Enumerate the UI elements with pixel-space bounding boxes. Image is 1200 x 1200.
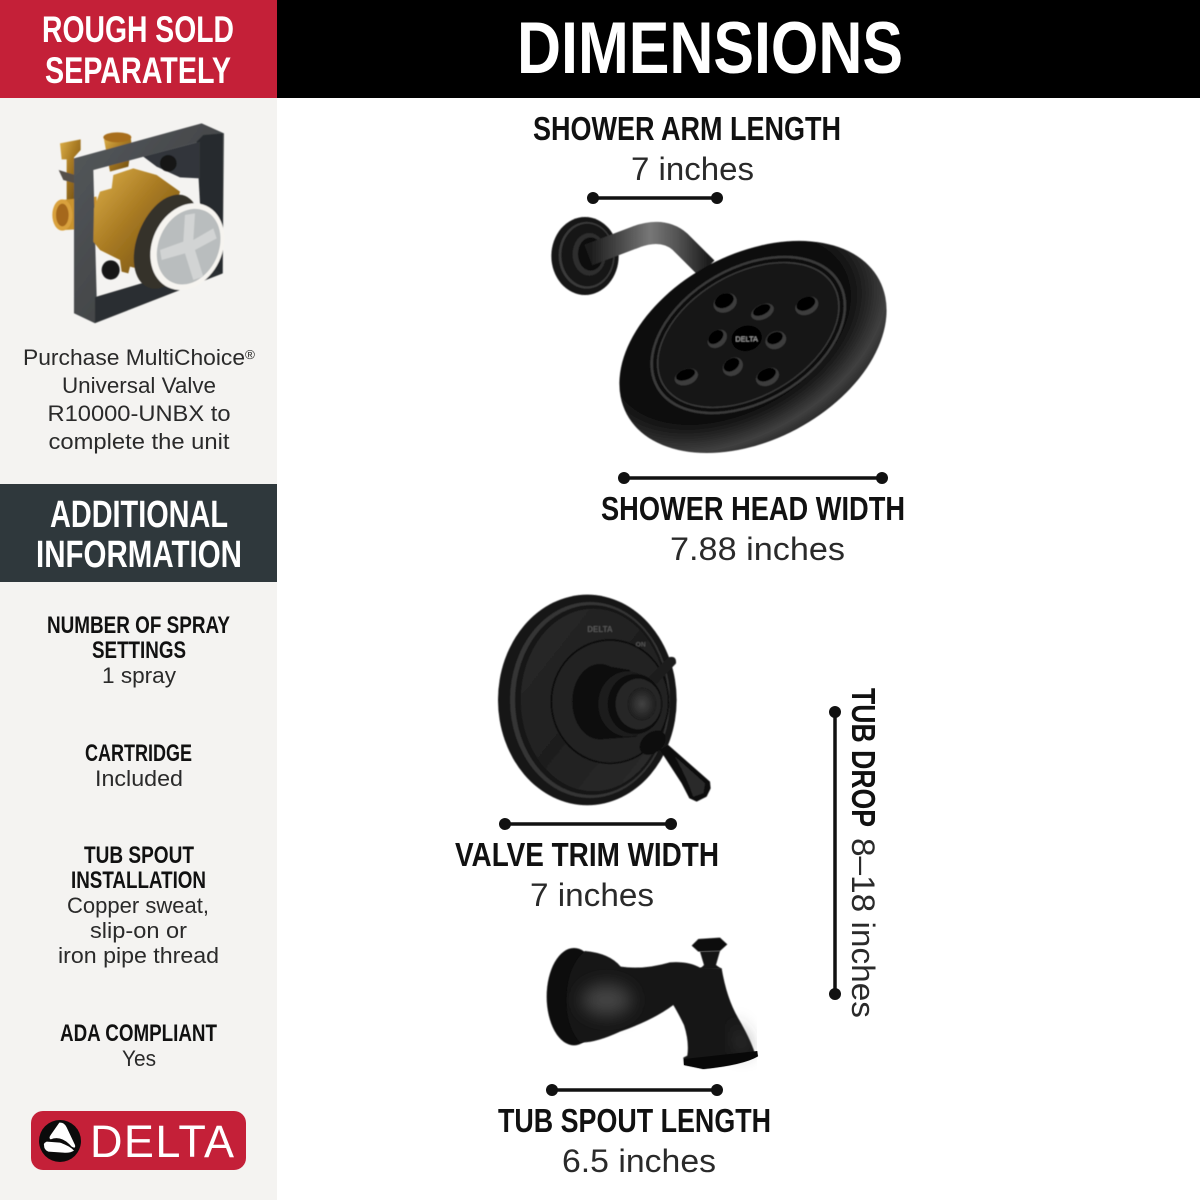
banner: rough sold separately: SEPARATELY xyxy=(45,50,231,91)
banner: rough sold separately: ROUGH SOLD xyxy=(42,9,234,50)
info: ada compliant: ADA COMPLIANT xyxy=(60,1020,217,1047)
image: valve trim: DELTA xyxy=(587,625,613,634)
dimension line: shower arm xyxy=(587,192,723,204)
label: shower head width: 7.88 inches xyxy=(670,531,845,567)
logo: delta: DELTA xyxy=(90,1116,234,1167)
title banner: dimensions: DIMENSIONS xyxy=(517,8,903,89)
info: cartridge: Included xyxy=(95,766,183,791)
info: number of spray settings: 1 spray xyxy=(102,663,176,688)
label: tub drop: TUB DROP xyxy=(845,688,882,827)
label: tub spout length: 6.5 inches xyxy=(562,1143,716,1179)
label: tub spout length xyxy=(498,1102,771,1179)
caption: valve purchase note: ® xyxy=(245,347,255,362)
label: shower head width: SHOWER HEAD WIDTH xyxy=(601,490,905,527)
info: tub spout installation: TUB SPOUT xyxy=(84,842,194,869)
label: valve trim width: VALVE TRIM WIDTH xyxy=(455,836,719,873)
info: tub spout installation: slip-on or xyxy=(90,918,187,943)
banner: rough sold separately xyxy=(0,0,277,98)
image: rough-in valve xyxy=(52,123,238,323)
info: number of spray settings: SETTINGS xyxy=(92,637,186,664)
dimension line: shower head width xyxy=(618,472,888,484)
label: valve trim width: 7 inches xyxy=(530,877,654,913)
logo: delta xyxy=(31,1111,246,1170)
heading: additional information: INFORMATION xyxy=(36,534,242,576)
image: shower head and arm: DELTA xyxy=(735,334,758,343)
label: shower arm length: 7 inches xyxy=(631,151,754,187)
label: tub drop xyxy=(845,688,882,1018)
heading: additional information xyxy=(0,484,277,582)
info: tub spout installation xyxy=(58,842,219,968)
info: ada compliant: Yes xyxy=(122,1046,156,1071)
dimension line: valve trim width xyxy=(499,818,677,830)
label: shower arm length xyxy=(533,110,841,187)
caption: valve purchase note: R10000-UNBX to xyxy=(48,401,230,426)
image: valve trim: ON xyxy=(636,642,646,649)
info: ada compliant xyxy=(60,1020,217,1071)
info: tub spout installation: INSTALLATION xyxy=(71,867,206,894)
info: tub spout installation: Copper sweat, xyxy=(67,893,209,918)
image: tub spout xyxy=(547,938,758,1069)
label: shower arm length: SHOWER ARM LENGTH xyxy=(533,110,841,147)
label: valve trim width xyxy=(455,836,719,913)
caption: valve purchase note: Purchase MultiChoice xyxy=(23,345,237,370)
dimension line: tub drop xyxy=(829,706,841,1000)
image: shower head and arm xyxy=(551,198,923,496)
info: cartridge xyxy=(85,740,192,791)
caption: valve purchase note: Universal Valve xyxy=(62,373,216,398)
panel: left sidebar xyxy=(0,98,277,1200)
info: number of spray settings xyxy=(47,612,230,688)
heading: additional information: ADDITIONAL xyxy=(50,494,228,536)
info: tub spout installation: iron pipe thread xyxy=(58,943,219,968)
label: tub spout length: TUB SPOUT LENGTH xyxy=(498,1102,771,1139)
label: shower head width xyxy=(601,490,905,567)
image: valve trim xyxy=(498,595,711,805)
dimension line: tub spout length xyxy=(546,1084,723,1096)
caption: valve purchase note xyxy=(23,345,255,454)
info: cartridge: CARTRIDGE xyxy=(85,740,192,767)
caption: valve purchase note: complete the unit xyxy=(48,429,230,454)
info: number of spray settings: NUMBER OF SPRAY xyxy=(47,612,230,639)
title banner: dimensions xyxy=(277,0,1200,98)
label: tub drop: 8–18 inches xyxy=(845,838,881,1018)
